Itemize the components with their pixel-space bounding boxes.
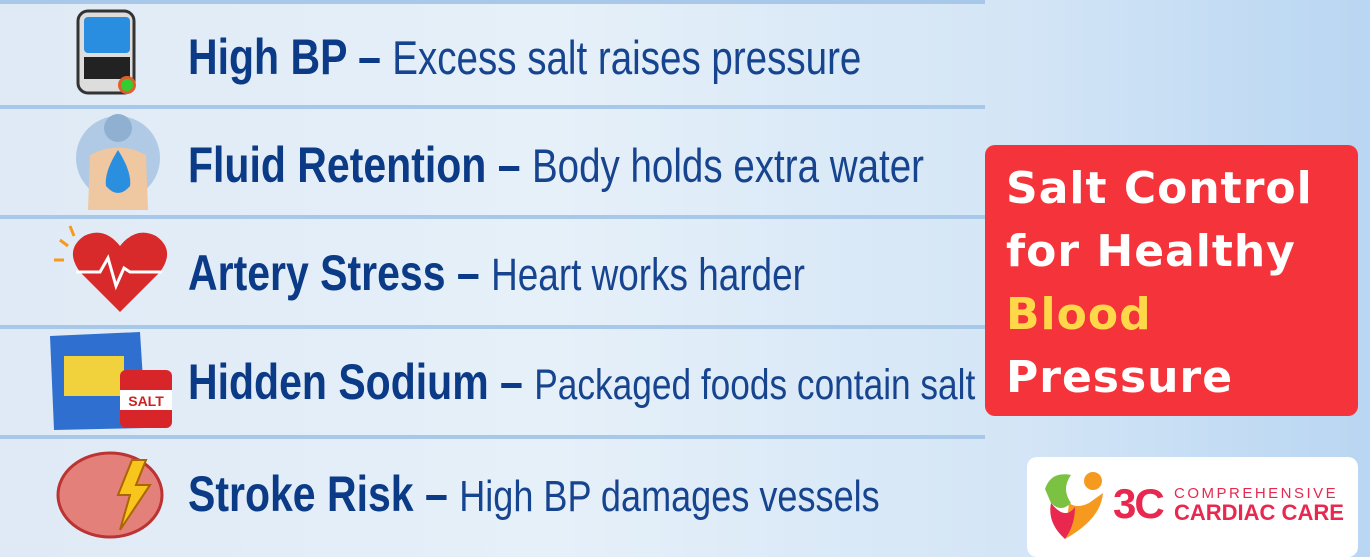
- title panel: Blood: [1006, 289, 1152, 340]
- icon: BP monitor: [76, 10, 136, 94]
- title panel: Pressure: [1006, 352, 1233, 403]
- title panel: Salt Control: [1006, 163, 1313, 214]
- title panel: [985, 145, 1358, 416]
- icon: brain with lightning: [56, 452, 164, 538]
- icon: chips and salt can: SALT: [128, 393, 164, 409]
- icon: chips and salt can: [50, 332, 172, 430]
- icon: body with water drop: [76, 114, 160, 210]
- logo: CARDIAC CARE: [1174, 500, 1344, 525]
- row 4 text: Hidden Sodium – Packaged foods contain salt: [188, 354, 975, 410]
- row 5 text: Stroke Risk – High BP damages vessels: [188, 466, 880, 522]
- row 2 text: Fluid Retention – Body holds extra water: [188, 137, 924, 193]
- title panel: for Healthy: [1006, 226, 1296, 277]
- logo: COMPREHENSIVE: [1174, 485, 1338, 502]
- logo: [1027, 457, 1358, 557]
- row 1 text: High BP – Excess salt raises pressure: [188, 29, 861, 85]
- icon: heart: [54, 226, 168, 312]
- logo: 3C: [1113, 480, 1163, 527]
- row 3 text: Artery Stress – Heart works harder: [188, 245, 805, 301]
